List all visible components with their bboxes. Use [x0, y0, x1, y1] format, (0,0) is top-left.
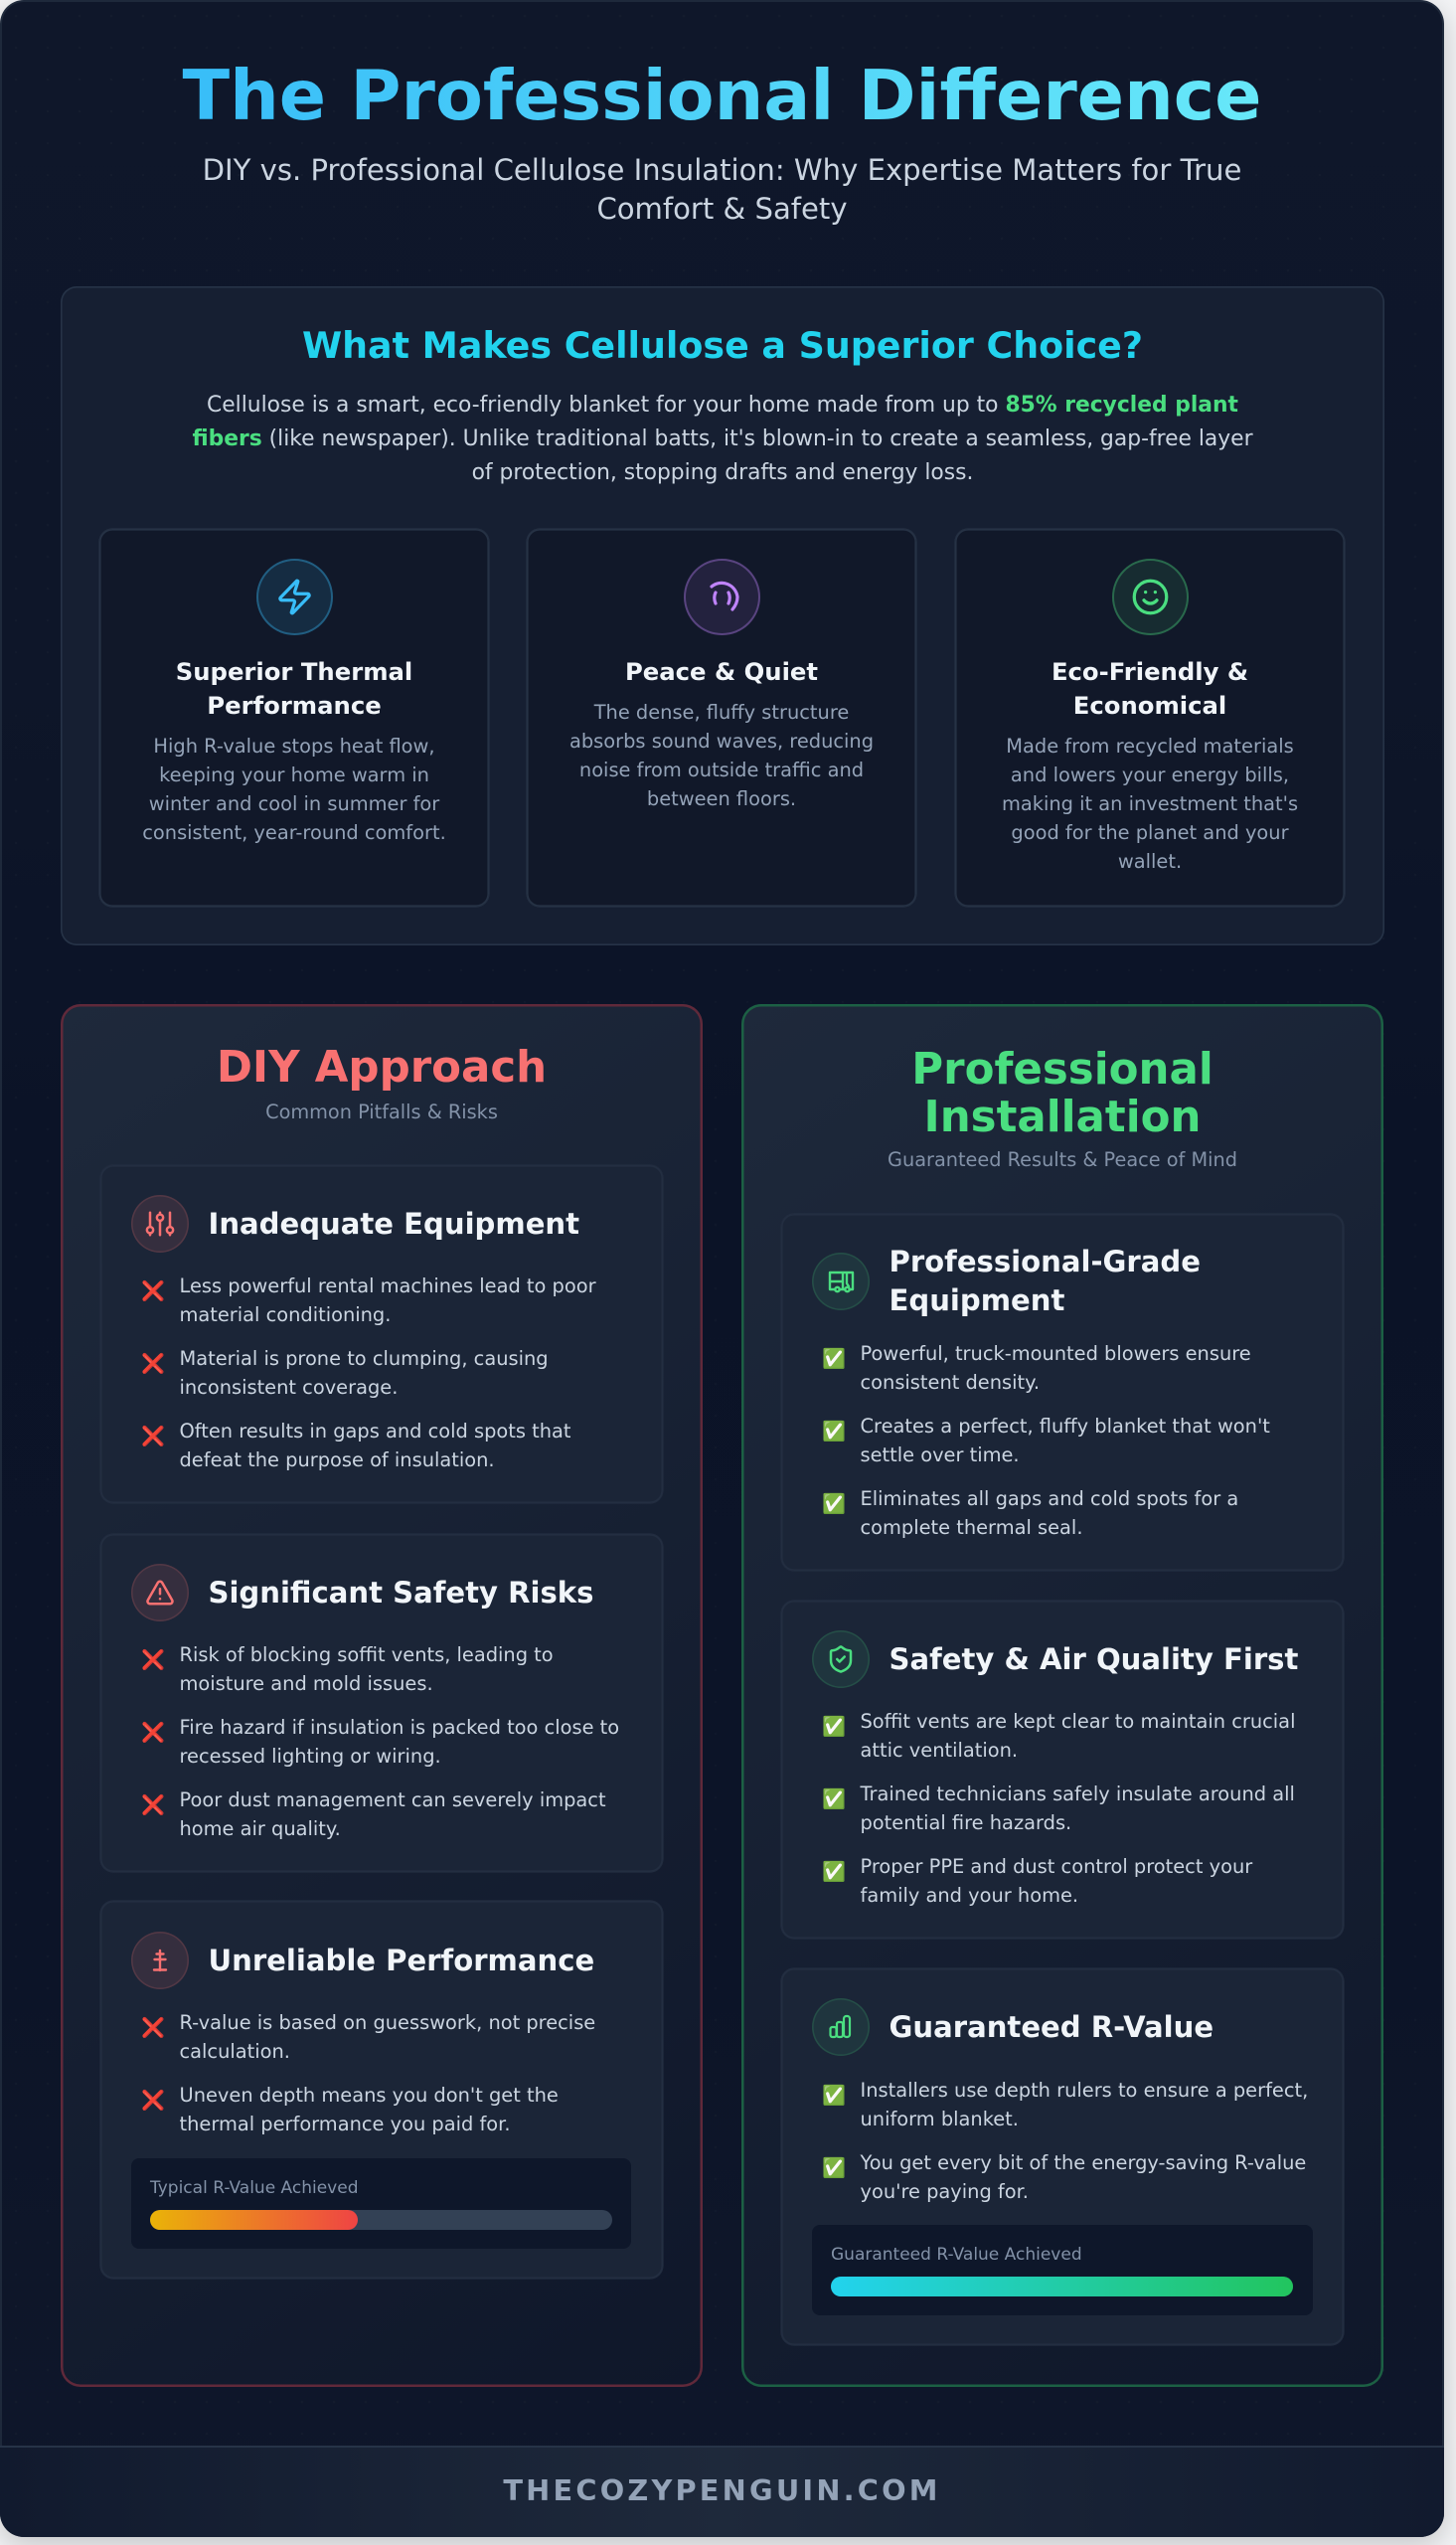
pitfall item — [141, 2011, 595, 2063]
icon: sliders — [131, 1195, 189, 1253]
subtitle: DIY vs. Professional Cellulose Insulation: Why Expertise Matters for True — [203, 153, 1241, 187]
pitfall item: material conditioning. — [179, 1303, 391, 1326]
pitfall item: ❌ — [141, 1425, 165, 1447]
card description: winter and cool in summer for — [149, 792, 439, 815]
card heading — [889, 1245, 1201, 1317]
pitfall item — [141, 1643, 554, 1695]
card heading: Safety & Air Quality First — [889, 1642, 1298, 1676]
pitfall item: ❌ — [141, 1721, 165, 1744]
footer website text: THECOZYPENGUIN.COM — [503, 2473, 941, 2507]
benefit item: attic ventilation. — [861, 1739, 1018, 1762]
pitfall item — [141, 1347, 549, 1399]
pitfall item: Risk of blocking soffit vents, leading to — [179, 1643, 554, 1666]
DIY subheading: Common Pitfalls & Risks — [265, 1101, 498, 1123]
card: safety risks — [100, 1534, 663, 1872]
benefit item: ✅ — [822, 1347, 846, 1370]
pitfall item: Often results in gaps and cold spots that — [179, 1420, 571, 1442]
pitfall item: defeat the purpose of insulation. — [179, 1448, 495, 1471]
panel: professional installation — [741, 1004, 1383, 2387]
card description: The dense, fluffy structure — [594, 701, 849, 724]
card title: Peace & Quiet — [625, 656, 818, 686]
card heading: Professional-Grade — [889, 1245, 1201, 1278]
icon: truck — [812, 1253, 870, 1310]
card description: wallet. — [1118, 850, 1182, 873]
intro paragraph: of protection, stopping drafts and energy loss. — [472, 459, 973, 485]
pitfall item: Material is prone to clumping, causing — [179, 1347, 549, 1370]
meter bar at 45 percent — [150, 2210, 612, 2230]
pitfall item — [141, 1716, 619, 1768]
icon: sound waves — [684, 559, 760, 635]
benefit item — [822, 1487, 1238, 1539]
card: unreliable performance — [100, 1901, 663, 2279]
card description: good for the planet and your — [1011, 821, 1289, 844]
meter label: Guaranteed R-Value Achieved — [831, 2245, 1082, 2265]
card: professional-grade equipment — [781, 1214, 1344, 1571]
subtitle — [203, 153, 1241, 226]
benefit item: Trained technicians safely insulate around all — [861, 1782, 1295, 1805]
pitfall item — [141, 1274, 596, 1326]
pitfall item: calculation. — [179, 2040, 290, 2063]
icon: bar chart — [812, 1998, 870, 2056]
benefit item: ✅ — [822, 1492, 846, 1515]
card: guaranteed R-value — [781, 1968, 1344, 2345]
pitfall item: recessed lighting or wiring. — [179, 1745, 441, 1768]
card title — [1052, 656, 1248, 720]
feature card: eco — [955, 529, 1345, 907]
benefit item: ✅ — [822, 1787, 846, 1810]
card title: Performance — [207, 690, 382, 720]
card title: Economical — [1073, 690, 1226, 720]
intro paragraph — [192, 392, 1253, 485]
intro paragraph: fibers (like newspaper). Unlike traditional batts, it's blown-in to create a seamless, gap-free layer — [192, 425, 1253, 451]
benefit item: Proper PPE and dust control protect your — [861, 1855, 1252, 1878]
benefit item: consistent density. — [861, 1371, 1040, 1394]
professional heading: Professional — [911, 1044, 1213, 1094]
pitfall item — [141, 1788, 606, 1840]
meter bar at 100 percent — [831, 2277, 1293, 2296]
benefit item: Creates a perfect, fluffy blanket that won't — [861, 1415, 1270, 1438]
icon: lightning bolt — [256, 559, 333, 635]
DIY heading: DIY Approach — [217, 1043, 547, 1093]
card heading: Equipment — [889, 1283, 1064, 1317]
pitfall item: Less powerful rental machines lead to poor — [179, 1274, 596, 1297]
pitfall item: ❌ — [141, 1648, 165, 1671]
pitfall item: moisture and mold issues. — [179, 1672, 433, 1695]
benefit item — [822, 1782, 1295, 1834]
card description: absorbs sound waves, reducing — [569, 730, 874, 753]
card: inadequate equipment — [100, 1165, 663, 1503]
card heading: Significant Safety Risks — [209, 1576, 593, 1610]
footer — [0, 2446, 1444, 2537]
intro paragraph: Cellulose is a smart, eco-friendly blanket for your home made from up to 85% recycled plant — [207, 392, 1238, 418]
benefit item — [822, 1415, 1270, 1466]
benefit item: Installers use depth rulers to ensure a perfect, — [861, 2079, 1308, 2102]
icon: smile — [1112, 559, 1189, 635]
benefit item: Soffit vents are kept clear to maintain crucial — [861, 1710, 1295, 1733]
benefit item: ✅ — [822, 1420, 846, 1442]
card description — [1002, 735, 1298, 873]
card heading: Inadequate Equipment — [209, 1207, 579, 1241]
benefit item — [822, 1342, 1251, 1394]
pitfall item: Uneven depth means you don't get the — [179, 2084, 559, 2107]
benefit item: ✅ — [822, 1860, 846, 1883]
benefit item: family and your home. — [861, 1884, 1078, 1907]
benefit item — [822, 2079, 1308, 2130]
card description: making it an investment that's — [1002, 792, 1298, 815]
icon: warning triangle — [131, 1564, 189, 1621]
pitfall item: Fire hazard if insulation is packed too close to — [179, 1716, 619, 1739]
card title: Eco-Friendly & — [1052, 656, 1248, 686]
pitfall item: ❌ — [141, 2089, 165, 2112]
pitfall item: Poor dust management can severely impact — [179, 1788, 606, 1811]
benefit item — [822, 2151, 1306, 2203]
benefit item: you're paying for. — [861, 2180, 1029, 2203]
card description: Made from recycled materials — [1006, 735, 1294, 758]
card description — [569, 701, 874, 810]
R-value meter: typical — [131, 2158, 631, 2249]
card description: consistent, year-round comfort. — [142, 821, 446, 844]
R-value meter: guaranteed — [812, 2225, 1313, 2315]
card heading: Unreliable Performance — [209, 1944, 594, 1977]
pitfall item: inconsistent coverage. — [179, 1376, 398, 1399]
benefit item: potential fire hazards. — [861, 1811, 1071, 1834]
feature card: thermal — [99, 529, 489, 907]
card description: noise from outside traffic and — [579, 759, 864, 781]
benefit item: ✅ — [822, 2084, 846, 2107]
pitfall item: ❌ — [141, 1793, 165, 1816]
pitfall item: ❌ — [141, 1279, 165, 1302]
card title: Superior Thermal — [176, 656, 412, 686]
meter label: Typical R-Value Achieved — [150, 2178, 358, 2198]
benefit item — [822, 1710, 1295, 1762]
benefit item: Eliminates all gaps and cold spots for a — [861, 1487, 1238, 1510]
pitfall item — [141, 1420, 571, 1471]
card description — [142, 735, 446, 844]
subtitle: Comfort & Safety — [596, 192, 848, 226]
benefit item: settle over time. — [861, 1443, 1020, 1466]
card title — [176, 656, 412, 720]
icon: shield check — [812, 1630, 870, 1688]
pitfall item: thermal performance you paid for. — [179, 2113, 511, 2135]
professional heading — [911, 1044, 1213, 1141]
pitfall item: R-value is based on guesswork, not precise — [179, 2011, 595, 2034]
benefit item — [822, 1855, 1252, 1907]
professional heading: Installation — [924, 1092, 1201, 1141]
title: The Professional Difference — [182, 56, 1262, 136]
pitfall item: ❌ — [141, 2016, 165, 2039]
card description: and lowers your energy bills, — [1011, 764, 1289, 786]
card description: High R-value stops heat flow, — [153, 735, 435, 758]
professional subheading: Guaranteed Results & Peace of Mind — [888, 1148, 1237, 1171]
pitfall item: ❌ — [141, 1352, 165, 1375]
panel heading: What Makes Cellulose a Superior Choice? — [302, 324, 1143, 367]
card description: between floors. — [647, 787, 796, 810]
card heading: Guaranteed R-Value — [889, 2010, 1213, 2044]
benefit item: You get every bit of the energy-saving R-value — [861, 2151, 1306, 2174]
pitfall item — [141, 2084, 559, 2135]
benefit item: uniform blanket. — [861, 2108, 1019, 2130]
benefit item: Powerful, truck-mounted blowers ensure — [861, 1342, 1251, 1365]
benefit item: complete thermal seal. — [861, 1516, 1082, 1539]
pitfall item: home air quality. — [179, 1817, 341, 1840]
benefit item: ✅ — [822, 1715, 846, 1738]
panel: what makes cellulose superior — [61, 286, 1384, 945]
benefit item: ✅ — [822, 2156, 846, 2179]
card description: keeping your home warm in — [159, 764, 429, 786]
feature card: quiet — [527, 529, 916, 907]
card: safety and air quality — [781, 1601, 1344, 1939]
icon: ruler — [131, 1932, 189, 1989]
panel: DIY approach — [61, 1004, 703, 2387]
